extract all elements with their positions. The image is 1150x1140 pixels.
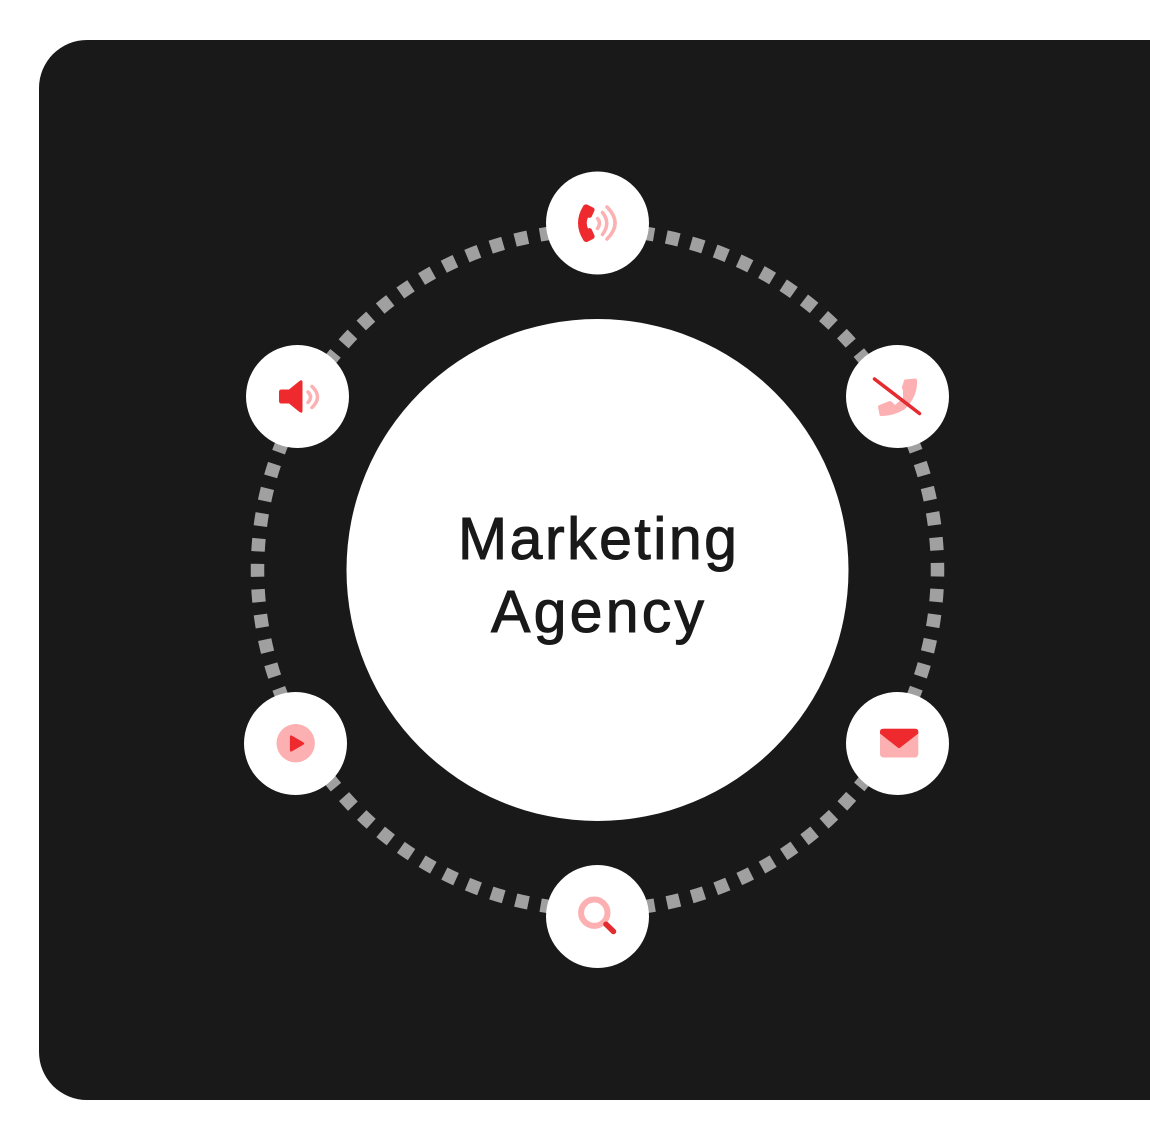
icon: strike-through line (874, 379, 920, 414)
icon: speaker (279, 380, 302, 413)
node: search (546, 865, 649, 968)
central hub: Marketing Agency (346, 319, 848, 821)
node: video play (244, 692, 347, 795)
icon: play disc (276, 724, 315, 762)
icon: sound waves (598, 207, 615, 239)
icon: pink handset (878, 378, 917, 416)
icon: play triangle (291, 737, 303, 750)
heading line: Agency: Agency (491, 579, 704, 645)
node: email (846, 692, 949, 795)
node: muted phone (846, 345, 949, 448)
icon: phone handset (578, 204, 595, 242)
icon: magnifier handle (606, 924, 614, 932)
icon: envelope flap (880, 729, 918, 748)
icon: magnifier lens (581, 900, 608, 926)
dotted ring connecting the channels (258, 230, 938, 910)
node: ringing phone (546, 172, 649, 274)
node: megaphone speaker (246, 345, 349, 448)
icon: envelope body (880, 729, 918, 758)
heading line: Marketing: Marketing (458, 506, 737, 572)
icon: speaker waves (308, 386, 318, 408)
